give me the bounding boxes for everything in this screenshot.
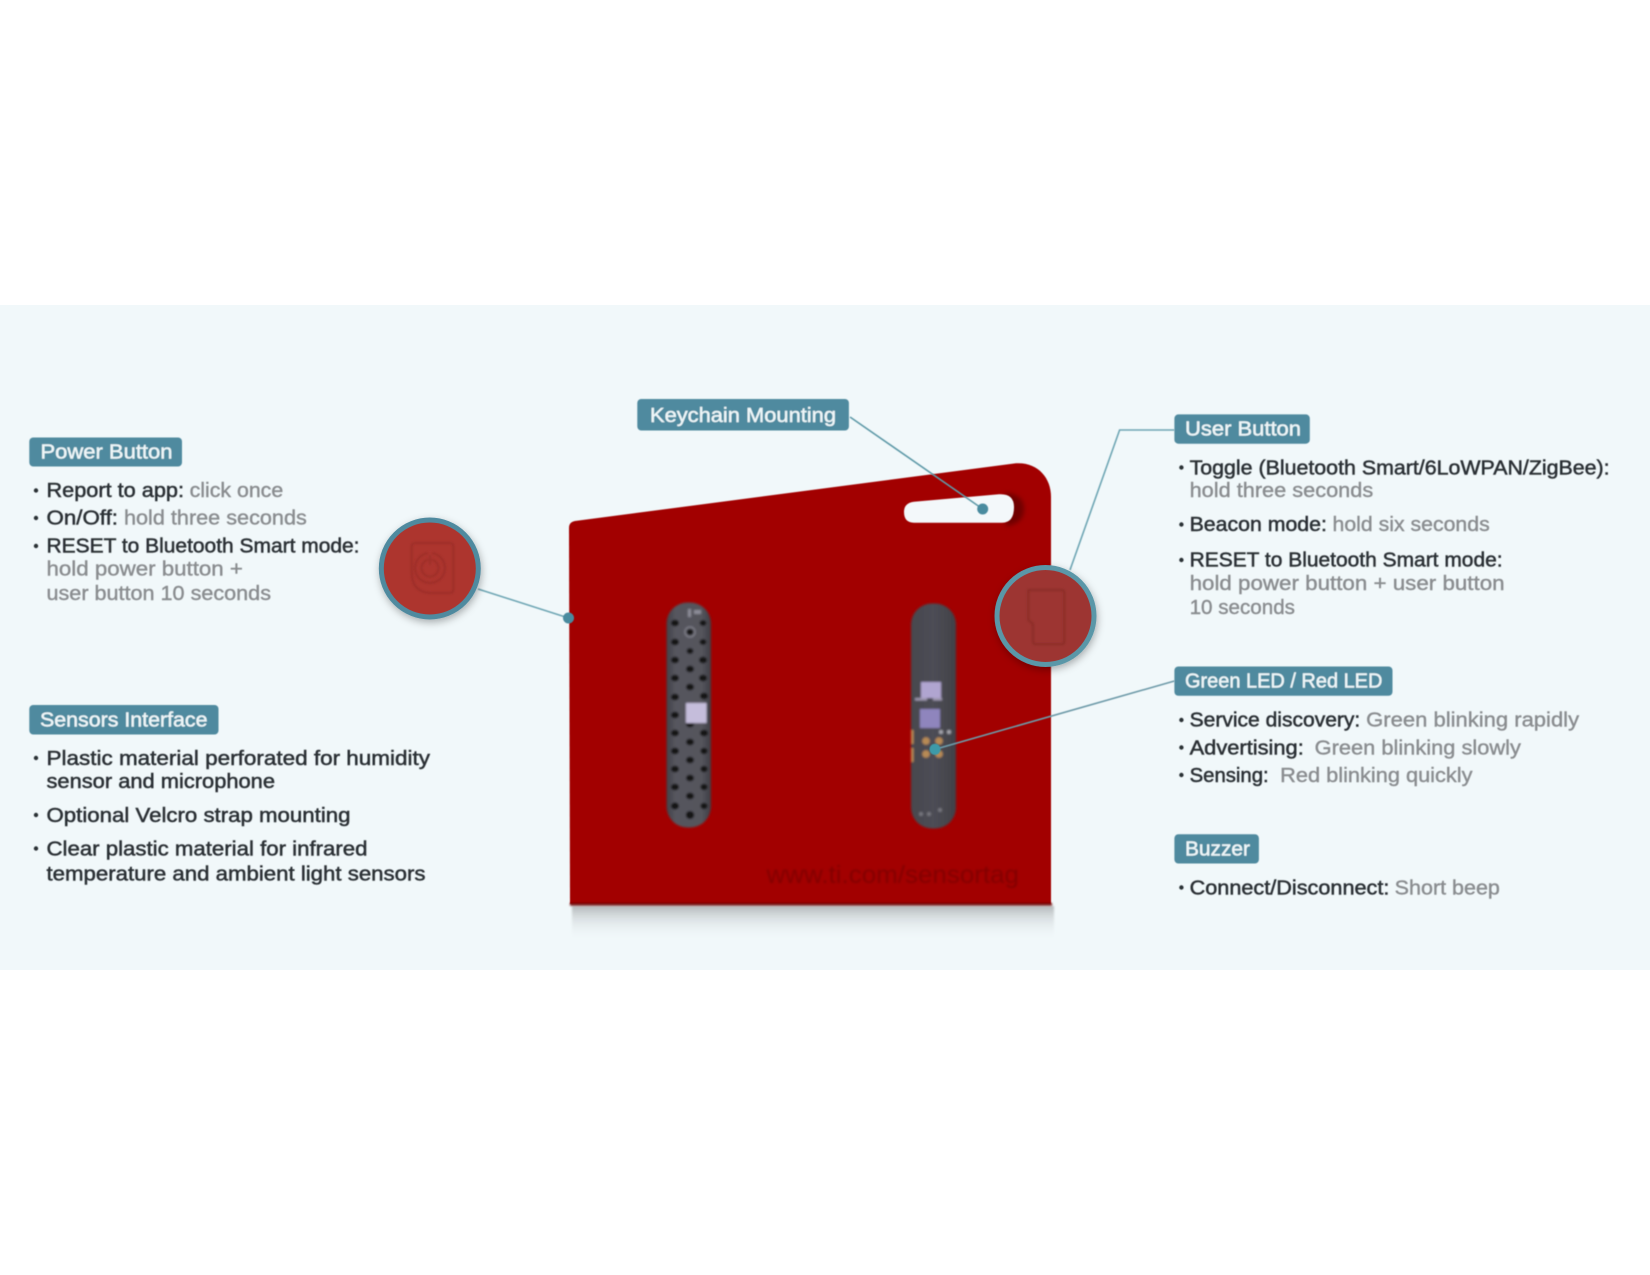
heading: Sensors Interface bbox=[40, 709, 207, 732]
user button list: hold six seconds bbox=[1332, 513, 1490, 536]
clear sensor window bbox=[686, 703, 706, 723]
button actions list: user button 10 seconds bbox=[46, 582, 271, 605]
user button list bbox=[1179, 456, 1610, 619]
floor shadow bbox=[572, 906, 1054, 940]
icon: user button closeup bbox=[997, 568, 1094, 664]
panel: user button bbox=[1174, 414, 1610, 619]
user button list: RESET to Bluetooth Smart mode: bbox=[1190, 549, 1503, 572]
case body bbox=[569, 463, 1051, 904]
top component detail bbox=[685, 609, 701, 637]
button actions list: Report to app: bbox=[46, 479, 184, 502]
power button dot bbox=[563, 612, 574, 624]
LED states list: Red blinking quickly bbox=[1280, 764, 1473, 787]
LED states list bbox=[1179, 709, 1580, 787]
power button leader bbox=[478, 589, 568, 618]
user button leader bbox=[1070, 430, 1174, 570]
buzzer list bbox=[1179, 876, 1500, 900]
heading bbox=[29, 438, 182, 466]
sensor interface list: Optional Velcro strap mounting bbox=[46, 804, 350, 827]
callout: Keychain Mounting: Keychain Mounting bbox=[650, 404, 836, 427]
panel: sensors interface bbox=[29, 705, 431, 886]
user button list: hold power button + user button bbox=[1190, 572, 1505, 595]
LED states list: Green blinking slowly bbox=[1315, 736, 1522, 759]
bottom edge bbox=[570, 903, 1052, 906]
LED states list: Green blinking rapidly bbox=[1366, 709, 1580, 732]
user button list: 10 seconds bbox=[1190, 596, 1295, 619]
light sensor squares bbox=[921, 682, 941, 698]
sensor interface list: sensor and microphone bbox=[46, 770, 275, 793]
leader lines and anchor dots bbox=[478, 417, 1174, 755]
keychain leader bbox=[850, 417, 983, 509]
left perforated window bbox=[666, 602, 711, 828]
LED states list: Service discovery: bbox=[1190, 709, 1360, 732]
heading: User Button bbox=[1185, 418, 1301, 440]
user button list: hold three seconds bbox=[1190, 479, 1373, 502]
button actions list: hold three seconds bbox=[124, 506, 307, 530]
button actions list: hold power button + bbox=[46, 558, 243, 580]
heading: Buzzer bbox=[1185, 838, 1250, 861]
button actions list: RESET to Bluetooth Smart mode: bbox=[46, 535, 360, 558]
button actions list: click once bbox=[190, 479, 283, 502]
sensor interface list bbox=[34, 747, 431, 886]
device: red SensorTag case bbox=[569, 463, 1054, 940]
callout: Keychain Mounting bbox=[637, 399, 849, 430]
heading: Power Button bbox=[40, 440, 172, 464]
LED states list: Advertising: bbox=[1190, 736, 1304, 759]
keychain slot bbox=[904, 494, 1014, 523]
engraved url: www.ti.com/sensortag bbox=[765, 861, 1019, 889]
heading: Green LED / Red LED bbox=[1185, 670, 1382, 692]
heading bbox=[29, 705, 218, 734]
heading bbox=[1174, 414, 1310, 444]
buzzer list: Short beep bbox=[1395, 876, 1500, 900]
right sensor window bbox=[911, 604, 956, 828]
background band bbox=[0, 305, 1650, 970]
user button list: Beacon mode: bbox=[1190, 513, 1327, 536]
LED states list: Sensing: bbox=[1190, 764, 1269, 787]
power symbol bbox=[412, 543, 453, 593]
user button list: Toggle (Bluetooth Smart/6LoWPAN/ZigBee): bbox=[1190, 456, 1610, 479]
keychain hole shade bbox=[1005, 493, 1024, 526]
LED dot bbox=[930, 744, 940, 755]
heading bbox=[1174, 834, 1259, 864]
panel: green and red LED bbox=[1174, 666, 1580, 787]
LED pads bbox=[922, 737, 930, 745]
LED leader bbox=[935, 681, 1174, 749]
sensor interface list: Clear plastic material for infrared bbox=[46, 838, 368, 861]
button actions list bbox=[34, 479, 360, 605]
user button outline bbox=[1028, 590, 1064, 644]
panel: power button bbox=[29, 438, 360, 605]
perforation holes bbox=[671, 620, 708, 819]
panel: buzzer bbox=[1174, 834, 1500, 900]
icon: power button closeup bbox=[381, 520, 478, 617]
sensor interface list: temperature and ambient light sensors bbox=[46, 862, 426, 886]
sensor interface list: Plastic material perforated for humidity bbox=[46, 747, 431, 770]
buzzer list: Connect/Disconnect: bbox=[1190, 876, 1389, 900]
keychain dot bbox=[977, 504, 988, 514]
button actions list: On/Off: bbox=[46, 506, 118, 530]
